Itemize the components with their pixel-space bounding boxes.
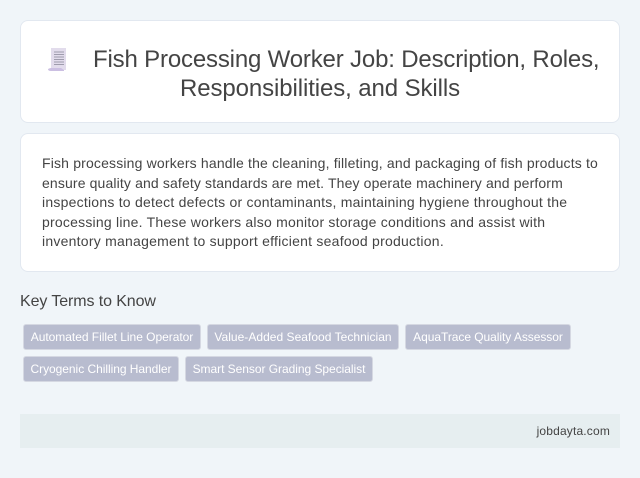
description text: inspections to detect defects or contaminants, maintaining hygiene throughout the [42,194,567,210]
tag: Smart Sensor Grading Specialist [193,362,365,376]
title: Fish Processing Worker Job: Description, Roles, [93,46,599,73]
description text: processing line. These workers also monitor storage conditions and assist with [42,214,545,230]
heading: key terms: Key Terms to Know [20,293,156,310]
description text: Fish processing workers handle the cleaning, filleting, and packaging of fish products to [42,155,598,171]
panel: description card [20,133,620,272]
tag [185,356,373,382]
tag [207,324,399,350]
description text [42,155,598,249]
icon: document [48,48,66,71]
tags: key terms [23,324,571,382]
footer bar [20,414,620,448]
tag [23,356,179,382]
footer source: jobdayta.com [537,424,610,438]
description text: inventory management to support efficient seafood production. [42,233,444,249]
tag: Value-Added Seafood Technician [214,330,392,344]
tag: AquaTrace Quality Assessor [413,330,563,344]
tag: Cryogenic Chilling Handler [30,362,172,376]
title [93,46,599,102]
description text: ensure quality and safety standards are met. They operate machinery and perform [42,175,563,191]
tag [405,324,571,350]
tag [23,324,201,350]
tag: Automated Fillet Line Operator [31,330,193,344]
panel: title card [20,20,620,123]
title: Responsibilities, and Skills [180,75,460,102]
